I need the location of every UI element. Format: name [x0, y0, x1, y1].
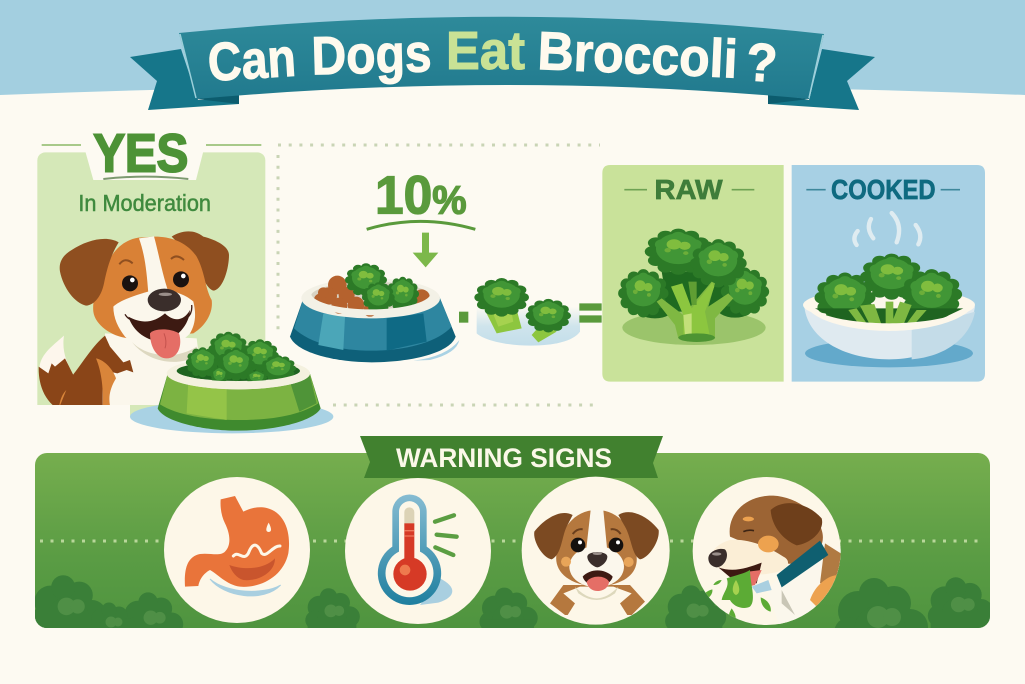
- mouth: [128, 310, 190, 342]
- tail: [40, 336, 68, 374]
- panel: warning signs: [35, 436, 990, 628]
- raw broccoli: [618, 229, 769, 345]
- banner right tail: [768, 49, 875, 110]
- dotted divider: [40, 540, 985, 542]
- banner main ribbon: [179, 17, 824, 99]
- green bowl with broccoli: [158, 332, 321, 431]
- panel: cooked: [792, 165, 985, 382]
- panel: yes in moderation: [30, 123, 333, 433]
- eyes: [122, 275, 138, 291]
- title: [206, 21, 779, 94]
- curved divider: [367, 221, 475, 229]
- right ear: [172, 231, 229, 291]
- in moderation label: In Moderation: [78, 190, 211, 216]
- body: [102, 333, 202, 406]
- icon: upset stomach: [164, 477, 310, 623]
- dotted frame: [278, 145, 600, 405]
- head: [93, 237, 212, 338]
- cooked heading: COOKED: [831, 174, 936, 205]
- broccoli bushes: [35, 575, 990, 628]
- banner left tail: [130, 49, 239, 110]
- yes ribbon: [82, 138, 207, 180]
- steam: [854, 213, 920, 245]
- green panel background: [37, 152, 265, 416]
- title: Eat: [446, 21, 525, 81]
- title banner: [130, 17, 875, 110]
- arrow down: [413, 233, 438, 267]
- blue bowl with food: [290, 263, 459, 362]
- title: Can: [206, 28, 298, 93]
- warning signs heading: WARNING SIGNS: [396, 443, 612, 473]
- plus mark: [459, 312, 468, 323]
- icon: vomiting dog: [693, 477, 847, 627]
- warning signs ribbon: [360, 436, 663, 478]
- sky header background: [0, 0, 1025, 110]
- yes heading: YES: [93, 123, 188, 183]
- cooked broccoli bowl: [803, 254, 975, 367]
- ten percent portion diagram: [290, 166, 602, 362]
- ten percent label: 10%: [375, 166, 467, 225]
- left ear: [60, 239, 119, 306]
- icon: thermometer: [345, 478, 491, 624]
- raw heading: RAW: [654, 174, 723, 205]
- title: Dogs: [311, 23, 432, 86]
- tongue: [150, 329, 180, 358]
- green bowl shadow: [130, 400, 333, 433]
- title: ?: [744, 32, 779, 94]
- white blaze and muzzle: [139, 236, 168, 293]
- nose: [148, 289, 181, 311]
- dog illustration: [39, 231, 229, 406]
- equals sign: [579, 303, 602, 323]
- panel: raw: [602, 165, 784, 382]
- icon: sad dog: [522, 477, 670, 625]
- title: Broccoli: [536, 21, 739, 90]
- small broccoli pieces: [474, 278, 580, 346]
